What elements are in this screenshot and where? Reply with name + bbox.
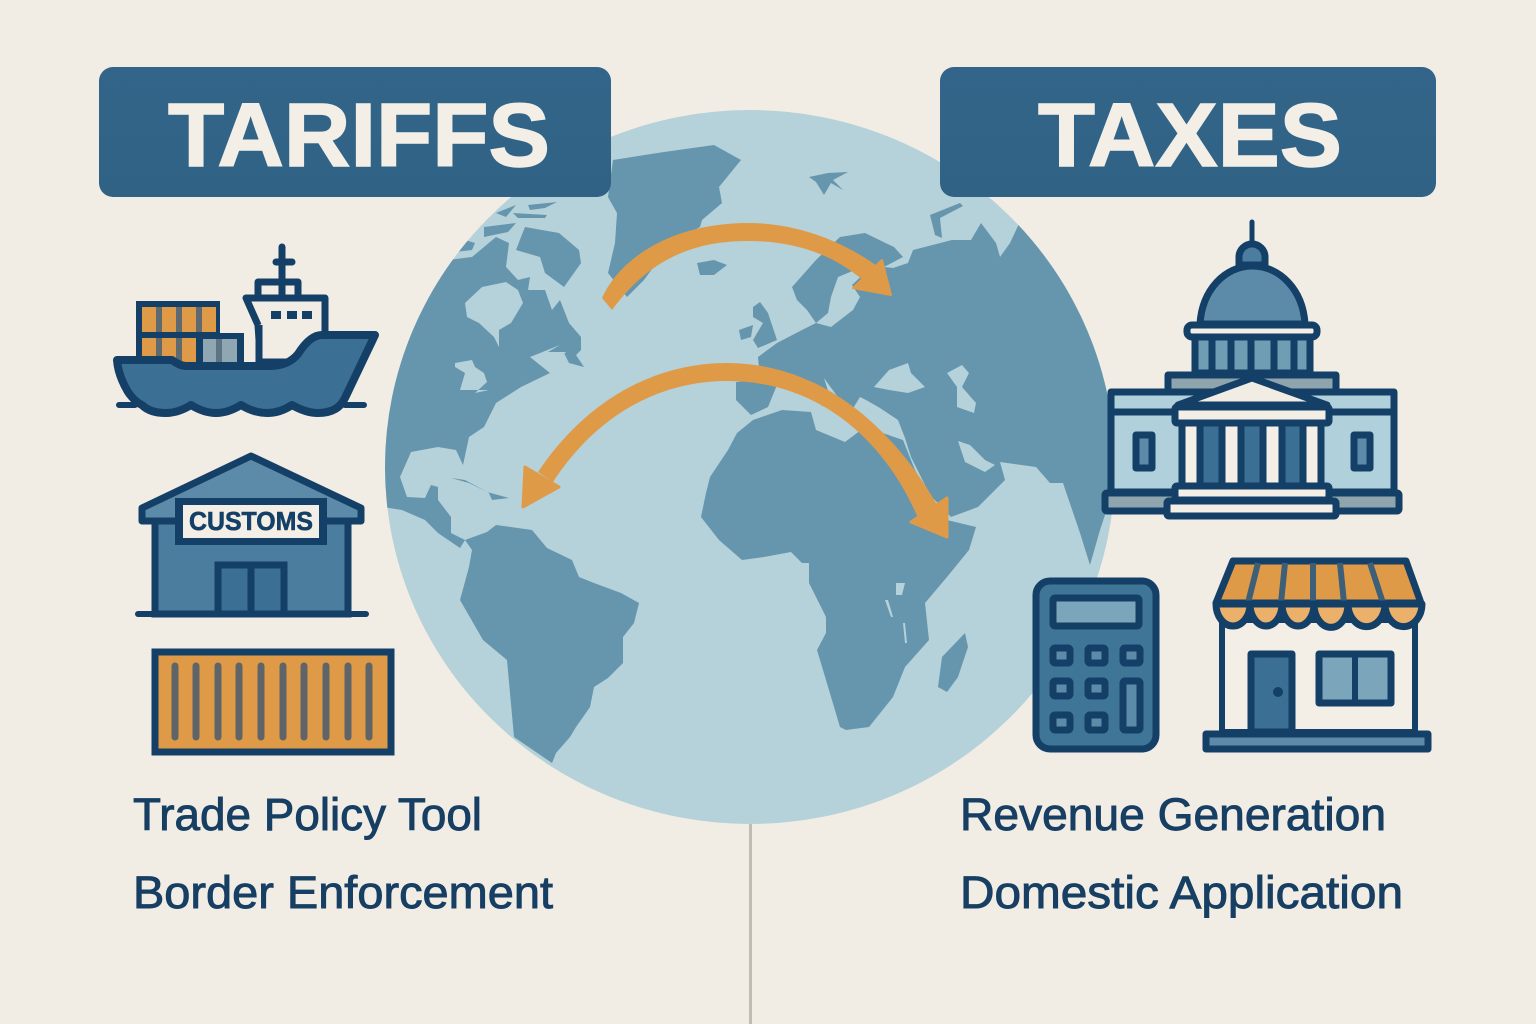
label: Trade Policy Tool: Trade Policy Tool [133,789,482,840]
Greenland [608,145,741,297]
label: Border Enforcement: Border Enforcement [133,867,554,918]
Hudson Bay and Great Lakes [455,282,566,393]
Scandinavia [792,233,903,323]
text: taxes points [960,789,1403,918]
Iceland [697,260,727,275]
Eurasia [736,223,1108,565]
icon: shipping container [155,652,391,752]
North America [370,237,584,548]
African lakes [885,583,907,643]
icon: customs building [138,456,366,614]
panel: TAXES heading: TAXES [1038,86,1342,186]
panel: TAXES heading [940,67,1436,197]
label: Domestic Application: Domestic Application [960,867,1403,918]
inland seas [874,363,995,472]
globe [370,110,1150,824]
arrow: North America to Russia [602,223,891,310]
South America [460,525,639,763]
icon: calculator [1036,581,1156,749]
panel: TARIFFS heading: TARIFFS [168,86,550,186]
label: Revenue Generation: Revenue Generation [960,789,1386,840]
arrow: two-way Americas to East Africa [523,363,947,537]
icon: capitol building [1105,222,1399,516]
Africa [701,410,976,730]
British Isles [739,302,777,348]
Caribbean islands [451,478,509,500]
Svalbard [809,172,848,195]
icon: cargo ship [117,247,375,413]
Baffin and Arctic islands [455,202,581,287]
sign text: CUSTOMS [189,506,313,536]
icon: storefront [1206,561,1428,749]
Madagascar [938,633,968,692]
Novaya Zemlya [930,203,963,238]
divider line [749,824,752,1024]
text: tariffs points [133,789,554,918]
world map landmasses [370,145,1150,763]
panel: TARIFFS heading [99,67,611,197]
